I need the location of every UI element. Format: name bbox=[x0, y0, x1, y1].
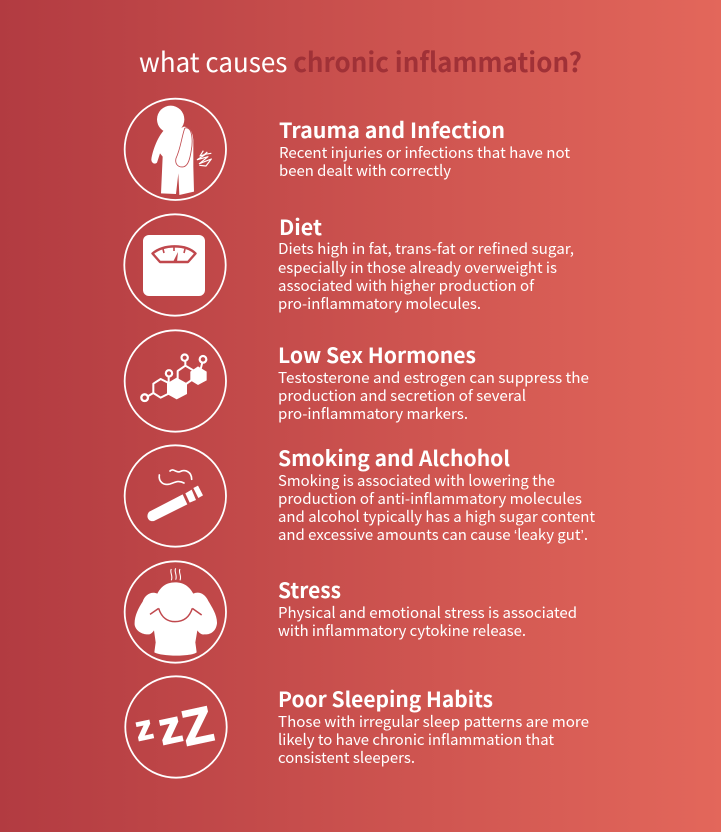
icon: sleep zzz bbox=[125, 676, 227, 778]
row: low sex hormones bbox=[125, 330, 589, 432]
description bbox=[278, 711, 589, 768]
description bbox=[278, 470, 595, 545]
description bbox=[278, 238, 574, 314]
row: smoking and alcohol bbox=[125, 443, 595, 547]
icon: sleep zzz: z bbox=[153, 699, 187, 755]
description: Physical and emotional stress is associated bbox=[278, 602, 577, 623]
description: Those with irregular sleep patterns are more bbox=[278, 711, 589, 732]
heading: Poor Sleeping Habits bbox=[278, 684, 493, 714]
icon: injured person bbox=[125, 99, 226, 200]
description: with inflammatory cytokine release. bbox=[278, 620, 526, 641]
heading: Low Sex Hormones bbox=[278, 340, 476, 370]
description bbox=[279, 142, 570, 181]
heading: Smoking and Alchohol bbox=[278, 443, 510, 473]
heading: Diet bbox=[279, 212, 322, 242]
description: production and secretion of several bbox=[278, 385, 526, 406]
description: Smoking is associated with lowering the bbox=[278, 470, 555, 491]
description: Testosterone and estrogen can suppress the bbox=[278, 367, 589, 388]
description: associated with higher production of bbox=[278, 275, 535, 296]
description bbox=[278, 602, 577, 641]
icon: hormone molecule bbox=[125, 330, 226, 432]
icon: sleep zzz: Z bbox=[177, 696, 218, 757]
description: especially in those already overweight is bbox=[278, 257, 557, 278]
row: stress bbox=[125, 561, 577, 663]
icon: sleep zzz: z bbox=[132, 708, 156, 749]
description: and alcohol typically has a high sugar content bbox=[278, 506, 595, 527]
icon: stressed person bbox=[125, 561, 226, 663]
description bbox=[278, 367, 589, 424]
heading: Trauma and Infection bbox=[279, 115, 505, 145]
row: diet bbox=[124, 212, 574, 316]
icon: weighing scale bbox=[124, 214, 226, 316]
description: and excessive amounts can cause ‘leaky gut’. bbox=[278, 524, 588, 545]
icon: cigarette bbox=[125, 445, 226, 547]
row: trauma and infection bbox=[125, 99, 570, 200]
description: likely to have chronic inflammation that bbox=[278, 729, 554, 750]
title: what causes chronic inflammation? bbox=[139, 41, 582, 80]
description: production of anti-inflammatory molecules bbox=[278, 488, 582, 509]
description: Diets high in fat, trans-fat or refined sugar, bbox=[278, 238, 574, 259]
description: consistent sleepers. bbox=[278, 747, 415, 768]
description: Recent injuries or infections that have not bbox=[279, 142, 570, 163]
row: poor sleeping habits bbox=[125, 676, 589, 778]
heading: Stress bbox=[278, 575, 341, 605]
description: been dealt with correctly bbox=[279, 160, 451, 181]
description: pro-inflammatory markers. bbox=[278, 403, 468, 424]
description: pro-inflammatory molecules. bbox=[278, 293, 481, 314]
